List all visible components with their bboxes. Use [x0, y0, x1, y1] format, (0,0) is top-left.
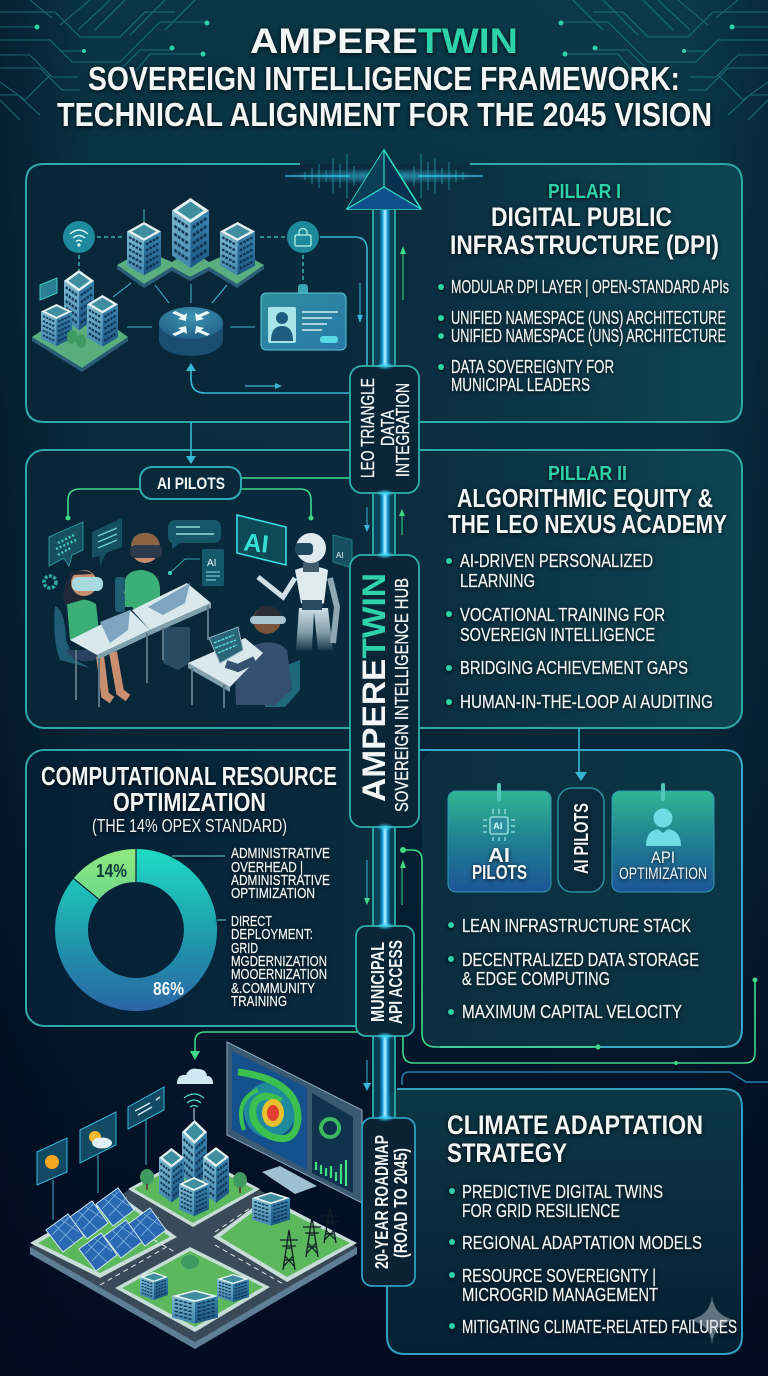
icon: lock circle	[287, 221, 319, 253]
node: municipal API access: API ACCESS	[386, 940, 406, 1024]
node: 20-year roadmap	[362, 1118, 415, 1286]
legend: direct deployment: TRAINING	[231, 994, 287, 1010]
card: API optimization: OPTIMIZATION	[619, 864, 707, 883]
central data spine	[357, 210, 406, 1120]
connector lines outside panels	[186, 422, 768, 1085]
monitor: storm dashboard	[227, 1042, 362, 1203]
climate bullets: REGIONAL ADAPTATION MODELS	[462, 1232, 702, 1253]
text: optimization bullets: MAXIMUM CAPITAL VELOCITY	[462, 1001, 682, 1022]
pillar bullets: BRIDGING ACHIEVEMENT GAPS	[460, 657, 688, 678]
text: computational resource heading: (THE 14% OPEX STANDARD)	[92, 816, 287, 836]
pillar bullets: LEARNING	[460, 570, 535, 591]
legend: administrative overhead: ADMINISTRATIVE	[231, 873, 330, 889]
node: LEO triangle data integration: INTEGRATION	[393, 383, 413, 477]
illustration: pillar I network	[32, 198, 367, 393]
central city block	[117, 198, 264, 288]
legend: administrative overhead: ADMINISTRATIVE	[231, 846, 330, 862]
legend: direct deployment	[231, 914, 327, 1010]
donut chart: 14 / 86 split	[55, 849, 217, 1011]
panel: resource optimization right background	[396, 750, 742, 1050]
legend: direct deployment: GRID	[231, 941, 258, 957]
pill: AI pilots vertical	[558, 788, 604, 892]
pillar label: PILLAR I	[548, 181, 621, 203]
callout: AI pilots pill	[66, 467, 350, 520]
decorative circuit traces: top right	[558, 0, 768, 120]
panel heading: STRATEGY	[447, 1138, 567, 1168]
node: LEO triangle data integration: DATA	[378, 410, 398, 446]
text: optimization bullets: LEAN INFRASTRUCTURE STACK	[462, 915, 692, 936]
icon: wifi circle	[63, 221, 95, 253]
floating data bubbles: AI	[336, 551, 344, 560]
decorative circuit traces: top left	[0, 0, 210, 120]
pillar bullets: AI-DRIVEN PERSONALIZED	[460, 550, 653, 571]
node: AmpereTwin sovereign intelligence hub: AMPERETWIN	[356, 573, 392, 802]
title block	[57, 22, 712, 133]
icon: weather sign sun	[37, 1138, 67, 1220]
text: computational resource heading: COMPUTATIONAL RESOURCE	[41, 761, 337, 791]
pillar bullets: MUNICIPAL LEADERS	[451, 374, 590, 395]
title: AmpereTwin wordmark: AMPERE TWIN	[250, 22, 518, 61]
text: computational resource heading: OPTIMIZATION	[113, 787, 266, 817]
panel heading: CLIMATE ADAPTATION	[447, 1110, 703, 1140]
card: API optimization	[612, 783, 714, 892]
solar panels	[46, 1188, 166, 1271]
pillar heading	[448, 483, 727, 539]
node: LEO triangle data integration: LEO TRIANGLE	[358, 378, 378, 478]
icon: ID card	[261, 284, 346, 350]
illustration: smart city and climate monitor	[30, 1042, 362, 1349]
connector glow points on spine	[376, 362, 394, 1122]
pill: AI pilots vertical: AI PILOTS	[571, 803, 593, 874]
node: municipal API access	[356, 926, 414, 1036]
panel: pillar I background	[26, 164, 742, 422]
text: optimization bullets	[448, 915, 699, 1022]
node: AmpereTwin sovereign intelligence hub	[350, 555, 419, 827]
panel: pillar II background	[26, 450, 742, 728]
illustration: pillar II classroom	[44, 467, 352, 708]
left city block	[32, 270, 128, 372]
icon: AI screen sign: AI	[242, 528, 270, 559]
floating data bubbles	[44, 518, 352, 588]
icon: triangle apex with waveform	[284, 150, 484, 209]
pillar bullets	[438, 276, 729, 395]
legend: direct deployment: DIRECT	[231, 914, 272, 930]
text: pillar II	[446, 463, 727, 712]
node: 20-year roadmap: 20-YEAR ROADMAP	[372, 1135, 392, 1269]
card: AI pilots chip: AI	[488, 845, 510, 867]
pillar bullets: DATA SOVEREIGNTY FOR	[451, 356, 614, 377]
legend: direct deployment: MOOERNIZATION	[231, 967, 327, 983]
figure: student at side desk	[188, 606, 300, 708]
climate bullets: FOR GRID RESILIENCE	[462, 1200, 620, 1221]
pillar heading: INFRASTRUCTURE (DPI)	[450, 230, 719, 260]
figure: student at far desk	[115, 533, 211, 670]
pillar bullets: VOCATIONAL TRAINING FOR	[460, 604, 665, 625]
icon: AI screen sign	[237, 515, 286, 565]
panel: computational resource background	[26, 750, 386, 1026]
climate bullets: PREDICTIVE DIGITAL TWINS	[462, 1181, 663, 1202]
towers	[140, 1120, 290, 1324]
pillar bullets	[446, 550, 713, 712]
legend: administrative overhead	[172, 846, 330, 920]
card: AI pilots chip: AI	[493, 821, 502, 832]
figure: student at near desk	[54, 570, 150, 707]
text: climate adaptation	[447, 1110, 737, 1337]
node: 20-year roadmap: (ROAD TO 2045)	[391, 1148, 411, 1258]
isometric base	[30, 1152, 357, 1349]
panel: climate adaptation background	[387, 1089, 742, 1354]
pillar heading: ALGORITHMIC EQUITY &	[457, 483, 713, 513]
pillar label: PILLAR II	[548, 463, 627, 485]
arrows: network links	[113, 237, 367, 393]
icon: weather sign cloud	[80, 1112, 116, 1193]
legend: administrative overhead: OVERHEAD |	[231, 860, 303, 876]
pillar heading: DIGITAL PUBLIC	[491, 202, 672, 232]
text: optimization bullets: DECENTRALIZED DATA STORAGE	[462, 949, 699, 970]
pillar bullets: SOVEREIGN INTELLIGENCE	[460, 624, 655, 645]
icon: sensor sign	[128, 1087, 164, 1165]
node: AmpereTwin sovereign intelligence hub: SOVEREIGN INTELLIGENCE HUB	[392, 578, 412, 812]
climate bullets: RESOURCE SOVEREIGNTY |	[462, 1265, 656, 1286]
climate bullets	[449, 1181, 737, 1337]
legend: administrative overhead: OPTIMIZATION	[231, 886, 315, 902]
node: LEO triangle data integration	[350, 366, 419, 493]
title: framework line: SOVEREIGN INTELLIGENCE FRAMEWORK:	[88, 60, 680, 97]
icon: sparkle watermark	[689, 1296, 735, 1344]
floating data bubbles: AI	[207, 558, 216, 569]
panel heading	[447, 1110, 703, 1168]
pillar bullets: HUMAN-IN-THE-LOOP AI AUDITING	[460, 691, 713, 712]
donut chart: 14 / 86 split: 86%	[153, 979, 184, 999]
node: municipal API access: MUNICIPAL	[368, 942, 388, 1022]
card: AI pilots chip	[448, 783, 551, 892]
icon: central router	[159, 307, 223, 356]
card: AI pilots chip: PILOTS	[472, 862, 527, 884]
callout: AI pilots pill: AI PILOTS	[157, 474, 225, 493]
icon: cloud and wifi	[177, 1069, 213, 1120]
donut chart: 14 / 86 split: 14%	[96, 861, 127, 881]
legend: direct deployment: &.COMMUNITY	[231, 981, 315, 997]
text: pillar I	[438, 181, 729, 395]
legend: direct deployment: MGDERNIZATION	[231, 954, 327, 970]
pillar heading	[450, 202, 719, 260]
icon: transmission pylons	[280, 1207, 339, 1270]
text: computational resource heading	[41, 761, 337, 836]
figure: robot	[258, 533, 337, 650]
legend: direct deployment: DEPLOYMENT:	[231, 927, 313, 943]
climate bullets: MICROGRID MANAGEMENT	[462, 1284, 658, 1305]
card: API optimization: API	[651, 848, 675, 867]
text: optimization bullets: & EDGE COMPUTING	[462, 968, 610, 989]
